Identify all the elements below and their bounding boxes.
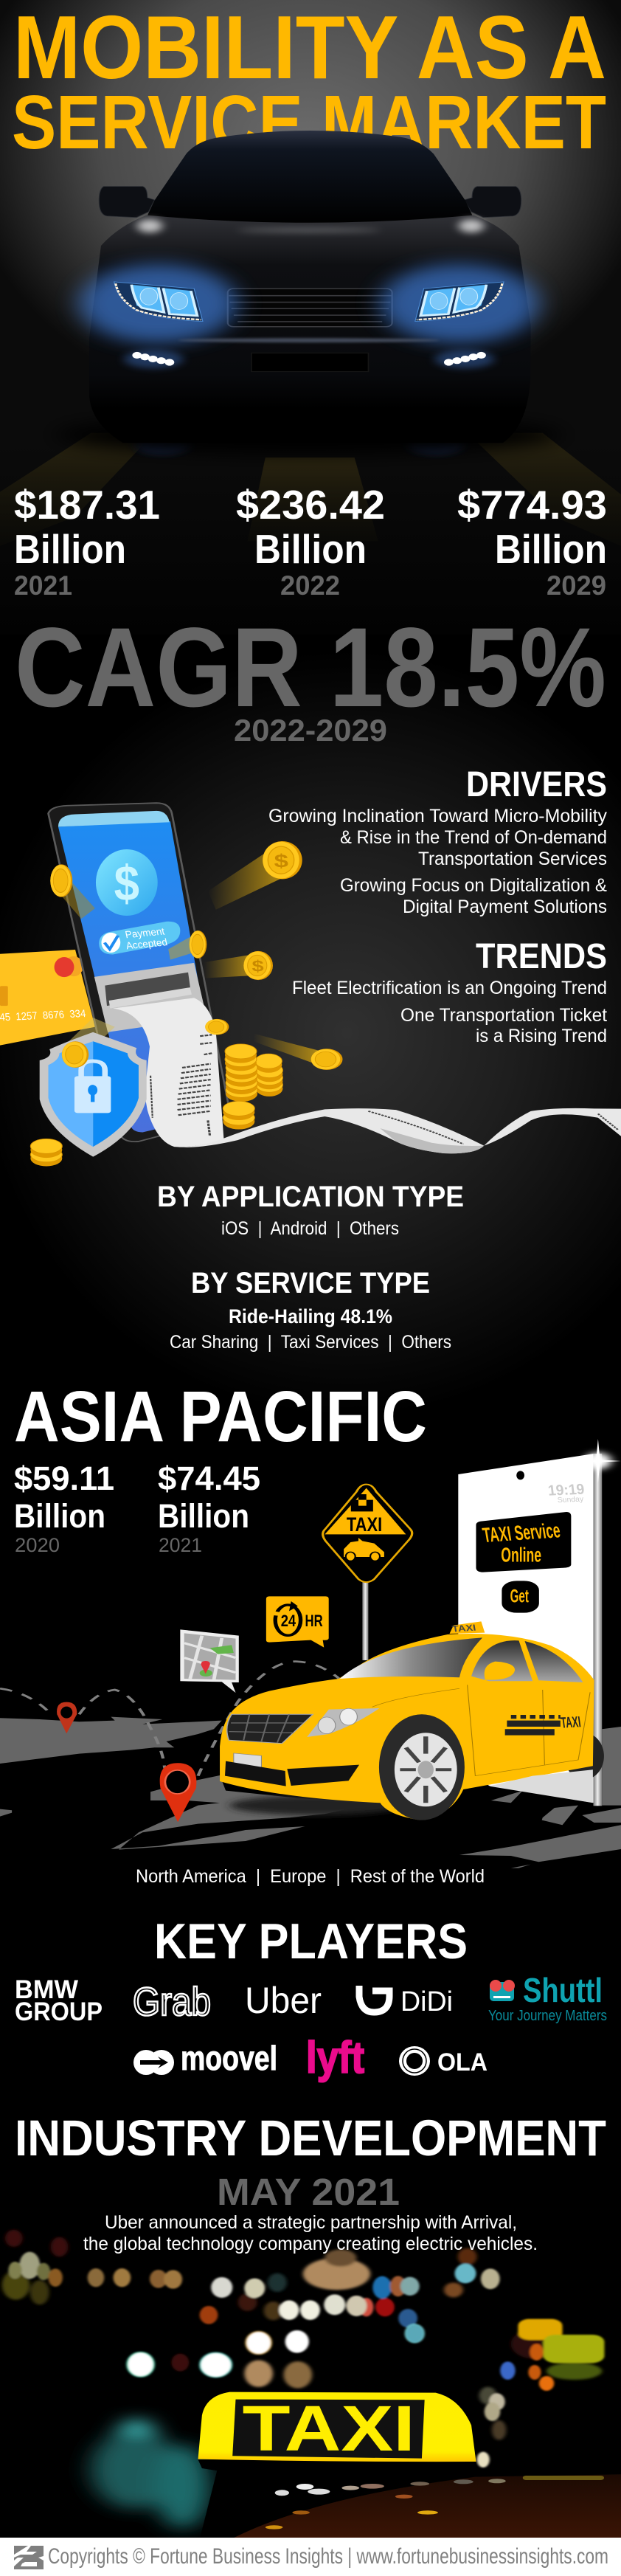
- segment: by service type: [170, 1267, 451, 1353]
- CAGR figure: 2022-2029: [234, 713, 387, 747]
- taxi sign pole: [362, 1581, 368, 1660]
- taxi body: [220, 1634, 594, 1820]
- payment accepted pill: Accepted: [125, 936, 168, 951]
- trends heading: TRENDS: [476, 937, 607, 976]
- underbody shadow: [55, 415, 563, 455]
- phone chrome edge: [582, 1439, 621, 1806]
- logo: BMW Group: BMW: [15, 1975, 78, 2004]
- middle radial backdrop: [0, 635, 621, 1417]
- logo: DiDi: [359, 1986, 453, 2017]
- footer logo: [14, 2546, 44, 2569]
- drivers list: Growing Inclination Toward Micro-Mobility: [268, 806, 607, 826]
- title: [12, 0, 606, 165]
- logo: Lyft: lyft: [306, 2033, 364, 2082]
- trends list: [292, 978, 607, 1046]
- logo: Uber: Uber: [245, 1980, 322, 2021]
- stat: 2029 market size: 2029: [547, 570, 606, 601]
- headlight: [307, 1708, 379, 1737]
- stat: 2021 market size: $187.31: [14, 482, 160, 528]
- 24 hour bubble: HR: [305, 1612, 323, 1630]
- stat: 2022 market size: $236.42: [236, 482, 385, 528]
- car mirrors: [99, 187, 521, 218]
- key players heading: KEY PLAYERS: [154, 1913, 468, 1969]
- payment accepted pill: Payment: [124, 925, 166, 940]
- large location pin: [160, 1763, 196, 1822]
- logo: moovel: moovel: [181, 2039, 277, 2077]
- drivers heading: DRIVERS: [466, 765, 607, 804]
- fog lights: [124, 351, 494, 368]
- taxi checker decal: [505, 1713, 582, 1736]
- development date: MAY 2021: [217, 2171, 400, 2213]
- logo: Grab: Grab: [133, 1980, 211, 2024]
- receipt printed lines: [150, 1035, 212, 1136]
- regional stat 2020: [14, 1460, 114, 1556]
- taxi road sign: [323, 1485, 412, 1582]
- world map: [0, 1717, 621, 1868]
- development text: Uber announced a strategic partnership with Arrival,: [105, 2212, 517, 2233]
- credit card: 45 1257 8676 334: [0, 1007, 86, 1023]
- flying coins: $: [274, 850, 288, 871]
- 24 hour bubble: [266, 1596, 329, 1648]
- trends list: One Transportation Ticket: [400, 1005, 607, 1026]
- coin trails: [58, 852, 319, 1064]
- shield with lock: [40, 1032, 147, 1157]
- drivers list: [268, 806, 607, 917]
- phone panel: Online: [501, 1543, 541, 1567]
- regional stat 2021: $74.45: [158, 1460, 260, 1497]
- development text: the global technology company creating electric vehicles.: [83, 2234, 538, 2254]
- phone panel: [458, 1454, 594, 1803]
- stat: 2022 market size: [236, 482, 385, 601]
- rear wheel: [564, 1733, 604, 1780]
- lower grilles: [225, 1761, 359, 1786]
- regional heading: Asia Pacific: ASIA PACIFIC: [14, 1376, 427, 1457]
- phone status bar: [58, 811, 170, 826]
- credit card: [0, 950, 95, 1046]
- flying coins: [50, 841, 343, 1070]
- phone panel: Get: [510, 1586, 529, 1607]
- regional stat 2021: Billion: [158, 1497, 249, 1535]
- stat: 2021 market size: 2021: [14, 570, 72, 601]
- road light beams: [0, 433, 621, 546]
- drivers list: Growing Focus on Digitalization &: [340, 875, 607, 896]
- development text: [83, 2212, 538, 2254]
- drivers list: Transportation Services: [418, 849, 607, 869]
- roof sign: TAXI: [451, 1623, 476, 1634]
- logo: BMW Group: [15, 1975, 103, 2026]
- illustration: phone payment: [0, 803, 621, 1166]
- stat: 2029 market size: [457, 482, 607, 601]
- regional stat 2021: 2021: [159, 1534, 202, 1556]
- logo: Ola: [399, 2046, 488, 2076]
- other regions line: North America | Europe | Rest of the World: [136, 1866, 485, 1887]
- map card bubble: [180, 1629, 239, 1693]
- teal reflection: [91, 2420, 210, 2529]
- phone screen: [58, 821, 221, 1132]
- logo: BMW Group: GROUP: [15, 1997, 103, 2026]
- receipt printer: [94, 963, 207, 1032]
- logo: Shuttl: Shuttl: [523, 1971, 603, 2009]
- phone body: [49, 803, 229, 1142]
- regional stat 2021: [158, 1460, 260, 1556]
- headlights: [79, 264, 538, 343]
- taxi dome sign: [198, 2392, 476, 2462]
- drivers list: Digital Payment Solutions: [403, 897, 607, 917]
- stat: 2022 market size: 2022: [280, 570, 340, 601]
- coin stacks: [30, 1044, 282, 1166]
- taxi car roof: [234, 2474, 621, 2538]
- stat: 2021 market size: Billion: [14, 526, 126, 572]
- logo: moovel: [133, 2039, 277, 2077]
- trends list: is a Rising Trend: [476, 1026, 607, 1046]
- dollar bubble: $: [114, 856, 139, 911]
- logo: Ola: OLA: [437, 2048, 488, 2076]
- logo: DiDi: DiDi: [400, 1986, 453, 2017]
- stat: 2029 market size: Billion: [495, 526, 607, 572]
- phone panel: 19:19: [547, 1481, 586, 1499]
- small location pin: [57, 1702, 77, 1733]
- segment: by service type: BY SERVICE TYPE: [191, 1267, 430, 1299]
- taxi car: [220, 1621, 604, 1820]
- flying coins: $: [252, 957, 264, 975]
- top spotlight backdrop: [0, 0, 621, 443]
- grille: [228, 289, 392, 327]
- taxi car: TAXI: [560, 1713, 582, 1731]
- front grille: [227, 1714, 313, 1744]
- segment: by application type: [157, 1181, 464, 1239]
- regional stat 2020: $59.11: [14, 1460, 114, 1497]
- stat: 2022 market size: Billion: [254, 526, 367, 572]
- segment: by service type: Car Sharing | Taxi Services | Others: [170, 1332, 451, 1353]
- bumper highlight: [178, 338, 440, 342]
- phone panel: Sunday: [557, 1495, 584, 1504]
- bokeh lights: [2, 2230, 604, 2468]
- showroom floor: [489, 1769, 593, 1803]
- car roof and windshield: [147, 131, 473, 223]
- stat: 2029 market size: $774.93: [457, 482, 607, 528]
- receipt paper: [113, 998, 223, 1147]
- number plate: [251, 353, 368, 372]
- dashed route: [0, 1662, 341, 1791]
- taxi shadow: [229, 1795, 404, 1815]
- illustration: taxi booking scene: [0, 1439, 621, 1868]
- receipt ribbon: [174, 1108, 621, 1153]
- regional stat 2020: 2020: [15, 1534, 60, 1556]
- dome label: TAXI: [243, 2392, 415, 2465]
- logo: Shuttl: [488, 1971, 607, 2024]
- payment accepted pill: [99, 922, 180, 954]
- taxi photo background: [2, 2230, 621, 2538]
- side windows: [471, 1640, 583, 1682]
- 24 hour bubble: 24: [281, 1612, 296, 1630]
- segment: by application type: iOS | Android | Others: [221, 1218, 399, 1239]
- sign base: [198, 2459, 477, 2538]
- drivers list: & Rise in the Trend of On-demand: [340, 827, 607, 848]
- segment: by service type: Ride-Hailing 48.1%: [229, 1305, 392, 1327]
- dark band under the spotlight: [0, 443, 621, 679]
- hood highlights: [137, 219, 484, 232]
- front plate: [234, 1753, 261, 1769]
- trends list: Fleet Electrification is an Ongoing Trend: [292, 978, 607, 998]
- side mirror: [485, 1662, 515, 1680]
- illustration: car front at night: [55, 131, 563, 455]
- car body: [89, 215, 531, 443]
- segment: by application type: BY APPLICATION TYPE: [157, 1181, 464, 1213]
- regional stat 2020: Billion: [14, 1497, 105, 1535]
- taxi road sign: TAXI: [347, 1513, 382, 1536]
- door lines: [372, 1685, 590, 1776]
- stat: 2021 market size: [14, 482, 160, 601]
- footer bar: [0, 2538, 621, 2576]
- front wheel: [379, 1714, 465, 1820]
- windshield: [340, 1637, 482, 1679]
- dollar bubble: [96, 849, 158, 916]
- roof reflections: [266, 2476, 604, 2530]
